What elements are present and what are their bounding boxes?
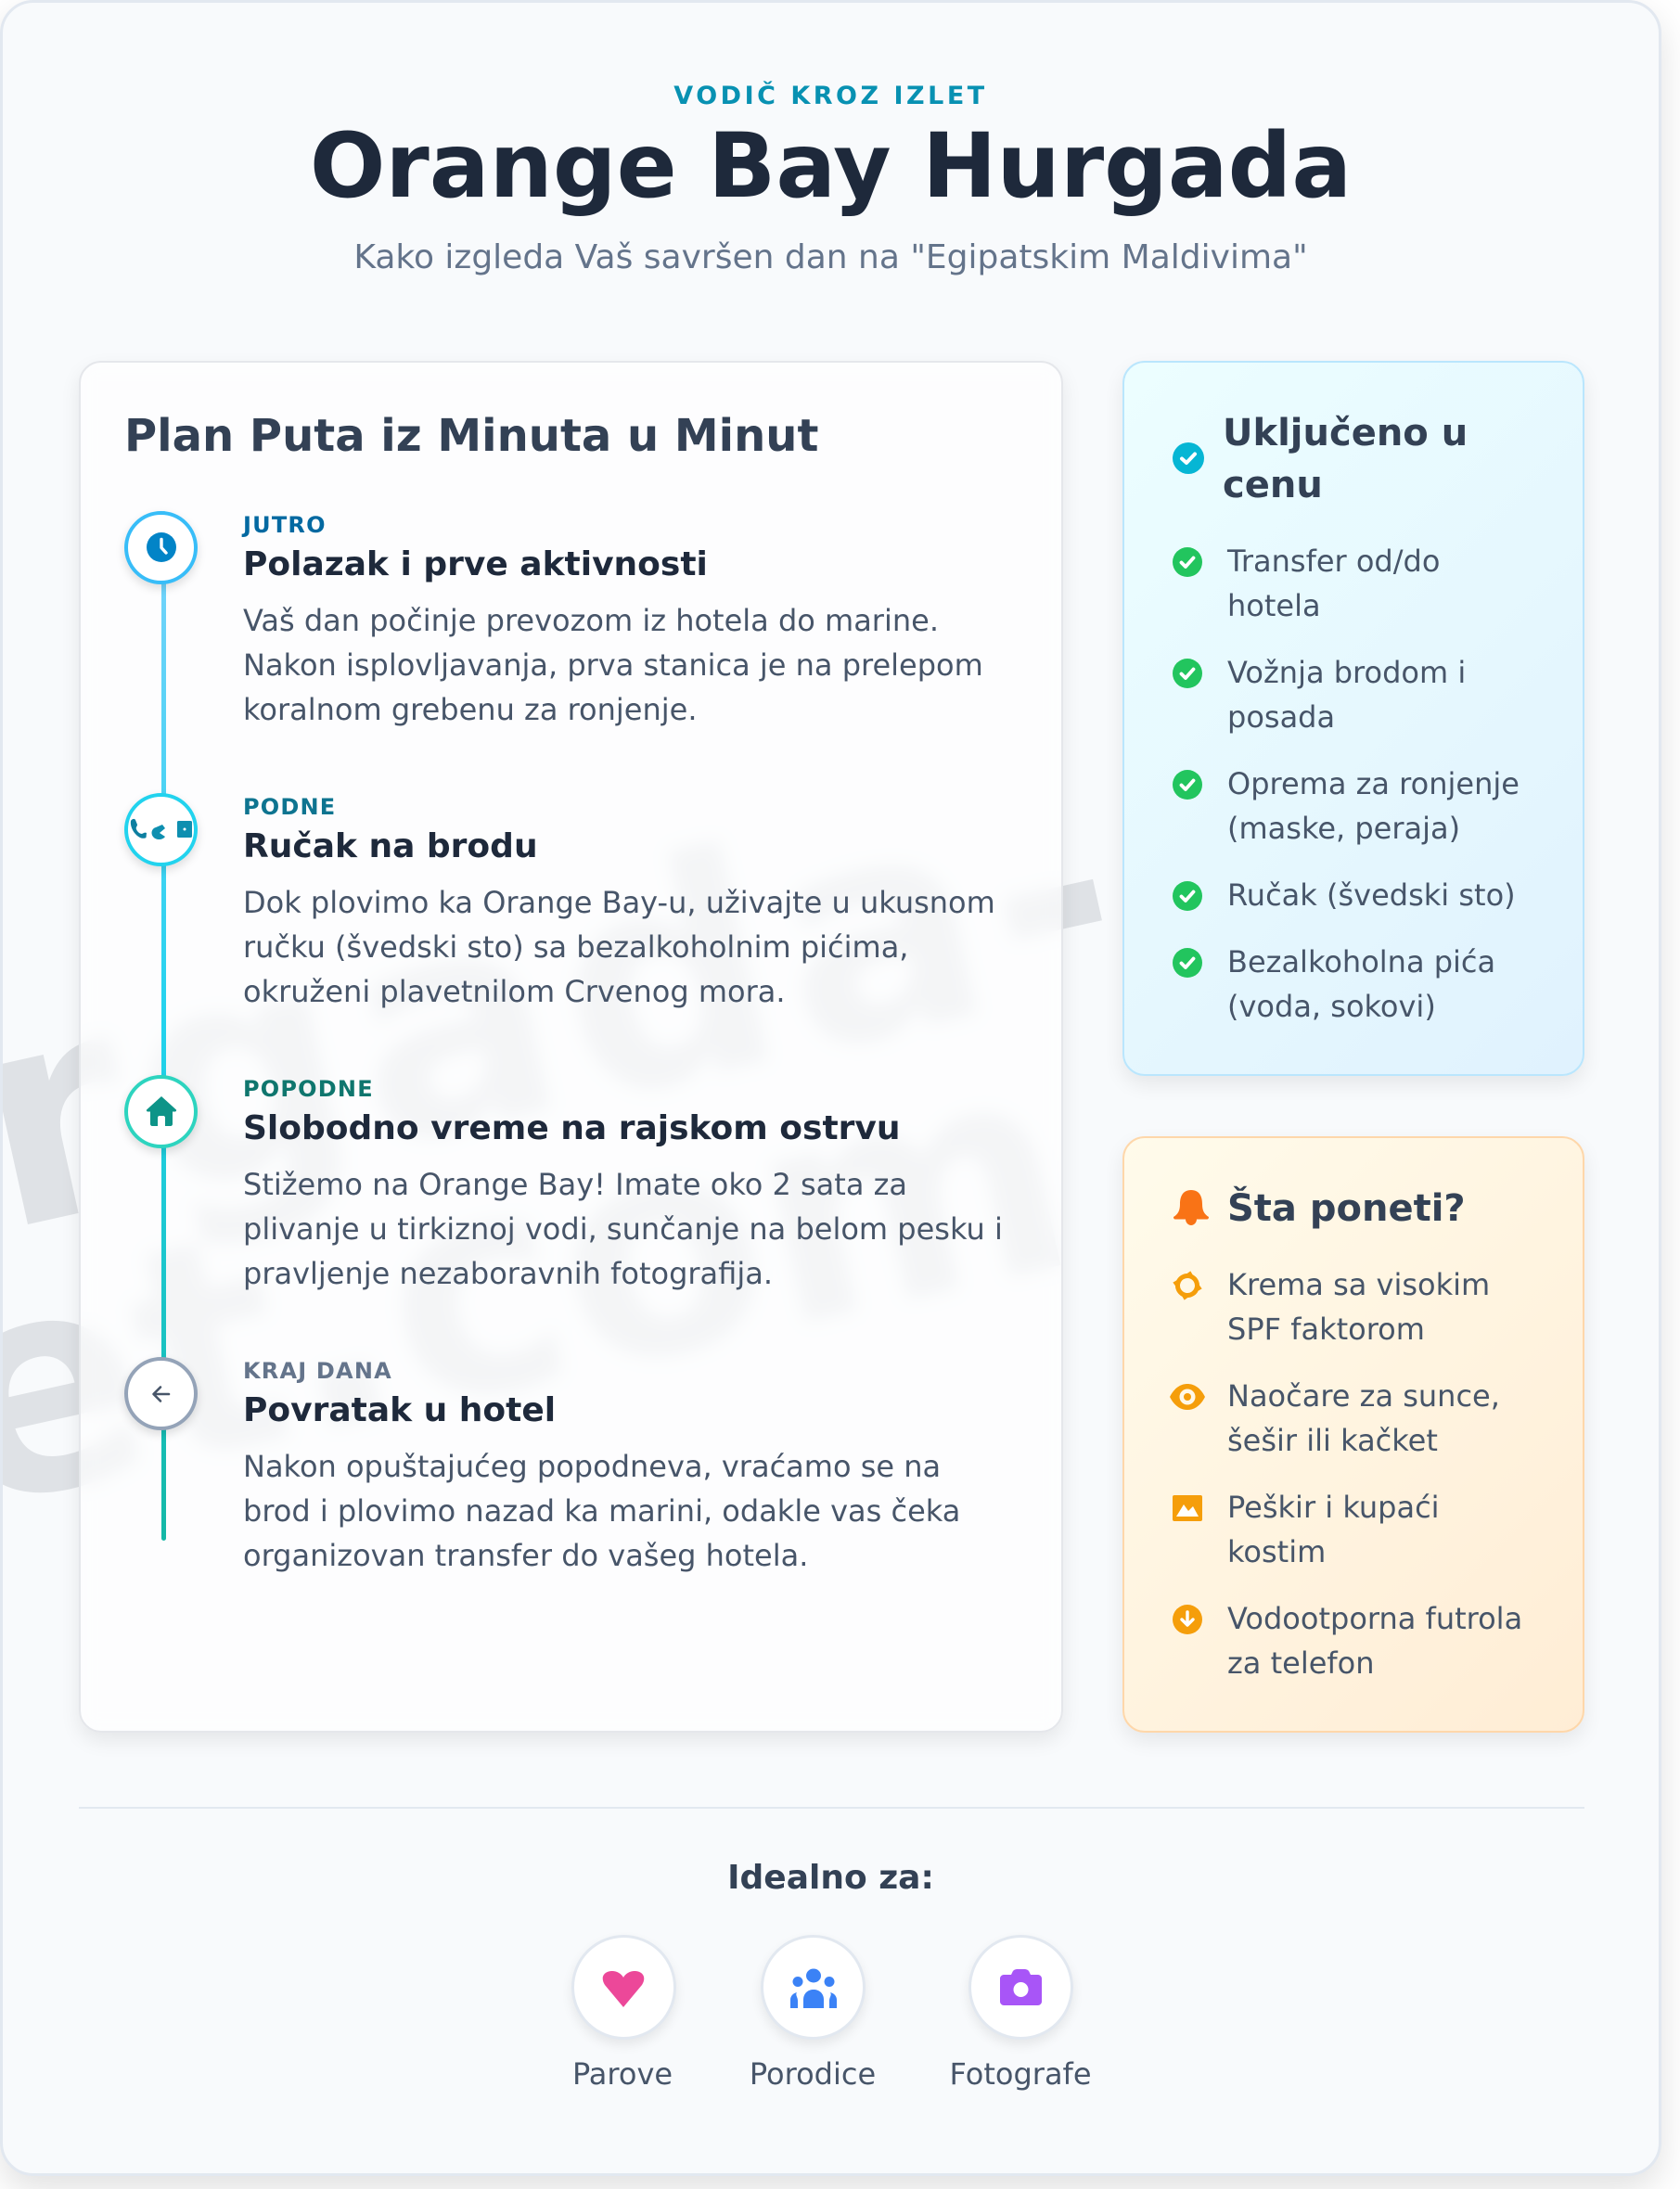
included heading: Uključeno u (1223, 412, 1468, 454)
panel: timeline (79, 361, 1063, 1733)
step text (243, 885, 995, 1009)
item text (1227, 1378, 1500, 1458)
icon: check (1173, 948, 1202, 978)
icon: heart (571, 1935, 676, 2040)
item text (1227, 1601, 1522, 1681)
title: Orange Bay Hurgada (310, 114, 1352, 218)
step text: Nakon isplovljavanja, prva stanica je na prelepom (243, 647, 983, 683)
item text: (maske, peraja) (1227, 811, 1460, 846)
label: JUTRO (243, 512, 327, 538)
icon: check (1173, 659, 1202, 688)
icon: people (761, 1935, 866, 2040)
step text (243, 603, 983, 727)
timeline step: noon (122, 793, 995, 1009)
included item 2 (1173, 655, 1466, 735)
step text: pravljenje nezaboravnih fotografija. (243, 1256, 773, 1291)
icon: arrow left (124, 1357, 198, 1430)
step text: organizovan transfer do vašeg hotela. (243, 1538, 808, 1573)
included item 4 (1173, 877, 1516, 913)
step text: Vaš dan počinje prevozom iz hotela do marine. (243, 603, 939, 638)
item text (1227, 655, 1466, 735)
bring heading: Šta poneti? (1227, 1187, 1466, 1230)
item text: Naočare za sunce, (1227, 1378, 1500, 1414)
eyebrow: VODIČ KROZ IZLET (673, 82, 988, 110)
item text: Krema sa visokim (1227, 1267, 1490, 1302)
item text: kostim (1227, 1534, 1326, 1569)
icon: included check (1173, 442, 1204, 474)
audience: couples (571, 1935, 677, 2092)
icon: eye (1170, 1384, 1205, 1410)
item text (1226, 544, 1440, 623)
icon: clock (124, 511, 198, 584)
item text (1227, 1267, 1490, 1347)
item text: Vožnja brodom i (1227, 655, 1466, 690)
timeline step: afternoon (122, 1075, 1003, 1291)
bring item: sunglasses (1170, 1378, 1500, 1458)
step text: plivanje u tirkiznoj vodi, sunčanje na belom pesku i (243, 1211, 1003, 1247)
item text (1227, 1490, 1440, 1569)
item text (1227, 944, 1495, 1024)
step heading: Povratak u hotel (243, 1391, 556, 1429)
bring item: towel (1173, 1490, 1440, 1569)
icon: download (1173, 1605, 1202, 1634)
icon: house (124, 1075, 198, 1148)
included heading: cenu (1223, 464, 1323, 506)
bring item: sunscreen (1173, 1267, 1490, 1347)
icon: image (1173, 1495, 1202, 1521)
item text: posada (1227, 699, 1335, 735)
item text: Bezalkoholna pića (1227, 944, 1495, 979)
step text (243, 1449, 960, 1573)
icon: camera (968, 1935, 1073, 2040)
icon: lunch (124, 793, 198, 866)
item text: za telefon (1227, 1645, 1375, 1681)
item text: Transfer od/do (1227, 544, 1440, 579)
item text: (voda, sokovi) (1227, 989, 1436, 1024)
ideal-for heading: Idealno za: (727, 1859, 934, 1897)
icon: check (1173, 547, 1202, 577)
timeline heading: Plan Puta iz Minuta u Minut (124, 410, 818, 462)
label: POPODNE (243, 1076, 374, 1102)
audience: families (750, 1935, 876, 2092)
label: Fotografe (950, 2056, 1091, 2092)
label: KRAJ DANA (243, 1358, 392, 1384)
label: Parove (572, 2056, 673, 2092)
audience: photographers (947, 1935, 1092, 2096)
icon: check (1173, 770, 1202, 800)
included heading (1223, 412, 1468, 506)
bring item: phone case (1173, 1601, 1522, 1681)
step text: koralnom grebenu za ronjenje. (243, 692, 698, 727)
step heading: Slobodno vreme na rajskom ostrvu (243, 1109, 901, 1147)
included item 5 (1173, 944, 1495, 1024)
step heading: Ručak na brodu (243, 827, 538, 865)
included item 3 (1173, 766, 1520, 846)
panel: included (1122, 361, 1584, 1076)
panel: what to bring (1122, 1136, 1584, 1733)
label: PODNE (243, 794, 336, 820)
subtitle: Kako izgleda Vaš savršen dan na "Egipatskim Maldivima" (353, 238, 1308, 276)
item text: Peškir i kupaći (1227, 1490, 1440, 1525)
step text: ručku (švedski sto) sa bezalkoholnim pićima, (243, 929, 908, 965)
item text: SPF faktorom (1227, 1312, 1425, 1347)
icon: bell (1173, 1190, 1209, 1225)
icon: check (1173, 881, 1202, 911)
item text: hotela (1227, 588, 1321, 623)
step heading: Polazak i prve aktivnosti (243, 545, 708, 583)
step text: okruženi plavetnilom Crvenog mora. (243, 974, 785, 1009)
timeline line (161, 511, 165, 1541)
step text: Stižemo na Orange Bay! Imate oko 2 sata za (243, 1167, 907, 1202)
item text: Oprema za ronjenje (1227, 766, 1520, 801)
item text (1227, 766, 1520, 846)
step text: Nakon opuštajućeg popodneva, vraćamo se na (243, 1449, 941, 1484)
item text: šešir ili kačket (1227, 1423, 1438, 1458)
timeline step: morning (122, 511, 983, 727)
step text: brod i plovimo nazad ka marini, odakle vas čeka (243, 1493, 960, 1529)
label: Porodice (750, 2056, 876, 2092)
step text: Dok plovimo ka Orange Bay-u, uživajte u ukusnom (243, 885, 995, 920)
step text (243, 1167, 1003, 1291)
item text: Vodootporna futrola (1227, 1601, 1522, 1636)
timeline step: end of day (122, 1357, 960, 1573)
icon: sun (1173, 1271, 1202, 1300)
item text: Ručak (švedski sto) (1227, 877, 1516, 913)
included item 1 (1173, 544, 1440, 623)
